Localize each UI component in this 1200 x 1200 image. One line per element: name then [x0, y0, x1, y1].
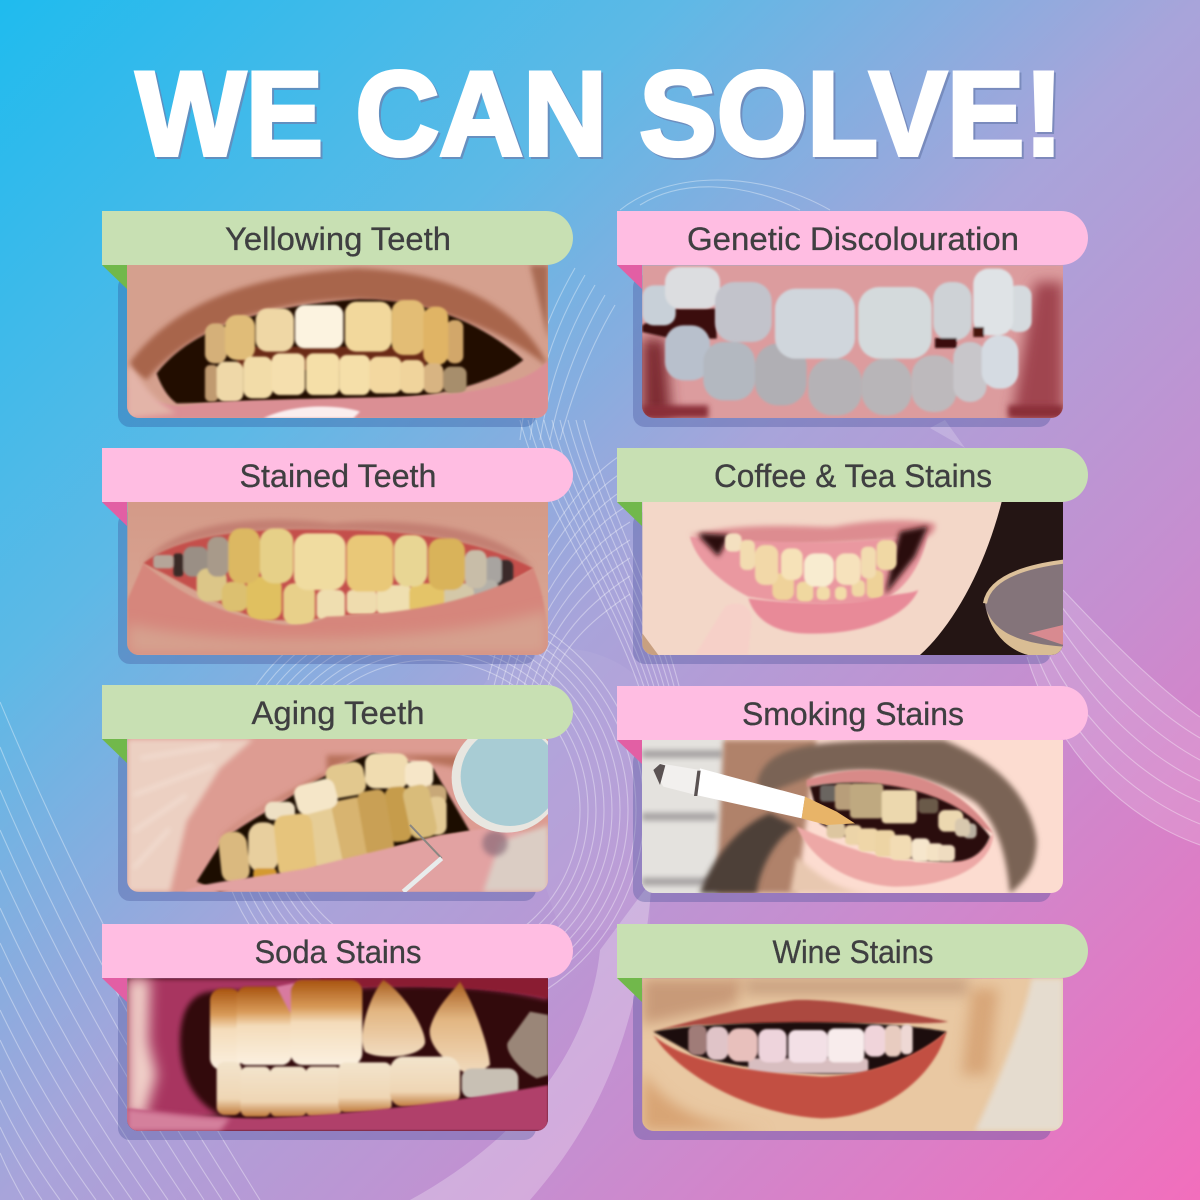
cigarette [653, 763, 855, 825]
photo: grey discoloured teeth [642, 265, 1063, 418]
label pill: Soda Stains [102, 924, 573, 978]
card: Aging Teeth [102, 685, 573, 901]
label pill: Stained Teeth: Stained Teeth [240, 458, 436, 494]
card: Soda Stains [102, 924, 573, 1140]
title: WE CAN SOLVE! [136, 47, 1063, 181]
label pill: Genetic Discolouration [617, 211, 1088, 265]
label pill: Soda Stains: Soda Stains [254, 934, 422, 970]
card: Yellowing Teeth [102, 211, 573, 427]
label pill: Wine Stains [617, 924, 1088, 978]
photo: coffee and tea stained smile [642, 502, 1063, 655]
label pill: Yellowing Teeth: Yellowing Teeth [225, 221, 451, 257]
label pill: Coffee & Tea Stains: Coffee & Tea Stains [714, 458, 992, 494]
card: Wine Stains [617, 924, 1088, 1140]
photo: yellowing teeth mouth [127, 265, 548, 418]
label pill: Coffee & Tea Stains [617, 448, 1088, 502]
label pill: Smoking Stains [617, 686, 1088, 740]
photo: wine stains smile [642, 978, 1063, 1131]
label pill: Aging Teeth: Aging Teeth [252, 695, 424, 731]
card: Genetic Discolouration [617, 211, 1088, 427]
photo: aging teeth with dental mirror [127, 723, 562, 892]
card: Stained Teeth [102, 448, 573, 664]
card: Smoking Stains [617, 686, 1088, 902]
label pill: Yellowing Teeth [102, 211, 573, 265]
label pill: Smoking Stains: Smoking Stains [742, 696, 964, 732]
label pill: Aging Teeth [102, 685, 573, 739]
title: WE CAN SOLVE! [138, 49, 1065, 183]
label pill: Wine Stains: Wine Stains [772, 934, 934, 970]
photo: soda stains mouth [127, 978, 548, 1131]
label pill: Genetic Discolouration: Genetic Discolouration [687, 221, 1019, 257]
photo: smoking stains with cigarette [642, 740, 1063, 893]
photo: stained teeth mouth [127, 502, 548, 655]
glass of tea [985, 562, 1063, 655]
card: Coffee & Tea Stains [617, 448, 1088, 664]
fingertip [695, 603, 752, 655]
label pill: Stained Teeth [102, 448, 573, 502]
